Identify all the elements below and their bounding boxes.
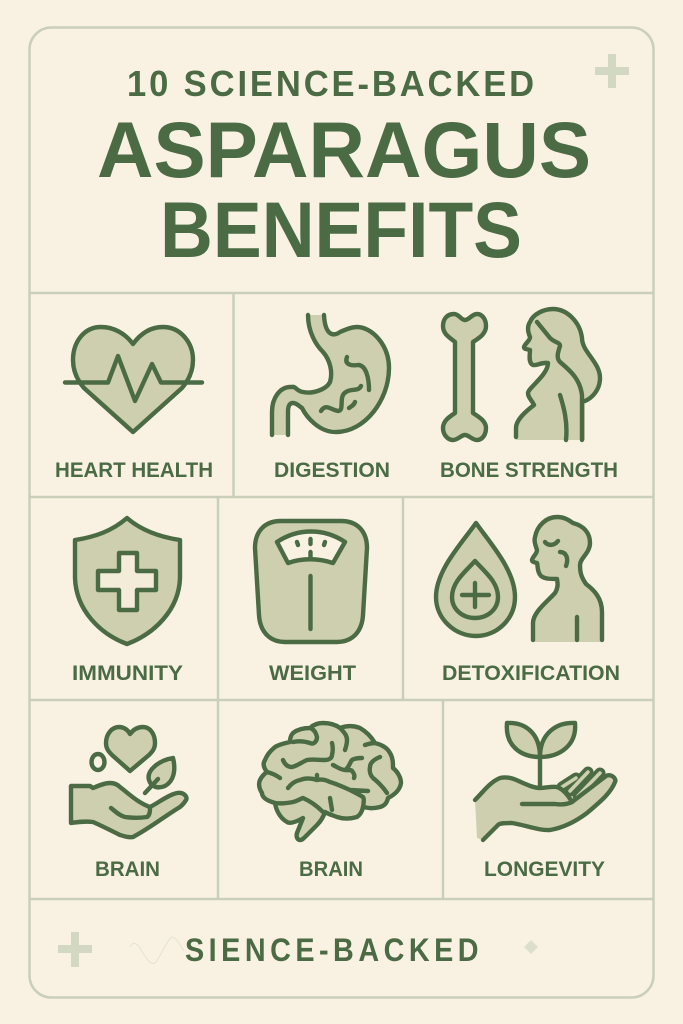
label: BRAIN — [299, 858, 363, 881]
label: BRAIN — [95, 858, 160, 881]
faded left sketch — [130, 937, 184, 964]
icon: stomach — [272, 315, 389, 435]
panel: brain — [259, 723, 401, 881]
title: ASPARAGUS — [97, 105, 591, 194]
label: BONE STRENGTH — [440, 459, 618, 482]
icon: brain — [259, 723, 401, 840]
icon: decorative plus top right — [595, 54, 629, 88]
icon: bathroom scale — [255, 521, 367, 642]
panel: heart health — [55, 327, 213, 482]
panel: footer — [58, 932, 538, 968]
icon: pregnant woman — [516, 309, 600, 440]
label: DIGESTION — [274, 459, 390, 482]
title: BENEFITS — [160, 185, 522, 274]
title — [97, 63, 591, 274]
label: LONGEVITY — [484, 858, 605, 881]
icon: hand holding heart and leaf — [71, 727, 187, 837]
label: WEIGHT — [269, 662, 356, 685]
icon: water drop — [436, 523, 515, 636]
icon: decorative plus bottom left — [58, 932, 92, 967]
panel: brain with hand — [71, 727, 187, 881]
faded diamond — [524, 940, 538, 954]
panel: longevity — [475, 723, 615, 881]
icon: hand holding sprout — [475, 723, 615, 840]
footer text: SIENCE-BACKED — [185, 932, 483, 968]
panel: weight — [255, 521, 367, 685]
label: DETOXIFICATION — [442, 662, 620, 685]
icon: shield with cross — [75, 518, 180, 644]
panel: detoxification — [436, 517, 620, 685]
icon: heart with pulse — [65, 327, 202, 432]
icon: body silhouette — [532, 517, 602, 642]
icon: bone — [443, 314, 486, 440]
panel: immunity — [72, 518, 183, 685]
label: HEART HEALTH — [55, 459, 213, 482]
label: IMMUNITY — [72, 662, 183, 685]
panel: digestion — [272, 315, 390, 482]
title: 10 SCIENCE-BACKED — [127, 63, 537, 104]
panel: bone strength — [440, 309, 618, 482]
